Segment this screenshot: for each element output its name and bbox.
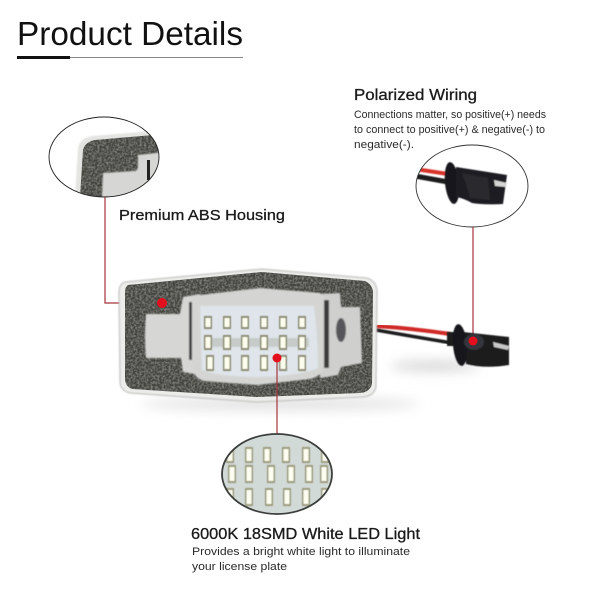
text block: polarized wiring: Polarized Wiring [354,87,477,104]
callout: LED zoom circle [222,434,332,514]
text block: LED light: 6000K 18SMD White LED Light [191,526,421,543]
text block: polarized wiring [354,87,546,151]
right tab [320,293,362,378]
LED board [200,306,318,377]
text block: LED light: Provides a bright white light to illuminate [192,546,410,558]
text block: LED light: your license plate [192,561,287,573]
left tab [145,294,200,375]
text block: polarized wiring: Connections matter, so positive(+) needs [354,109,546,121]
text block: polarized wiring: to connect to positive(+) & negative(-) to [354,124,545,136]
text block: polarized wiring: negative(-). [354,139,414,151]
callout: premium ABS housing zoom circle [49,117,165,197]
callout dots [157,298,478,362]
lens frame [192,288,326,385]
wires [376,326,452,343]
text block: LED light [191,526,421,573]
connector [447,323,509,367]
LED array [204,316,306,371]
callout line: housing [105,197,162,303]
foam gasket [125,272,373,397]
callout: connector zoom circle [415,145,528,227]
product: license plate light [119,269,377,402]
plate lens outline [119,269,377,402]
callout line: connector [472,227,474,341]
callout line: LED [276,358,278,434]
label: premium ABS housing: Premium ABS Housing [119,207,285,224]
light trace band [204,338,309,347]
title: Product Details [17,15,243,52]
shadow [140,398,420,410]
